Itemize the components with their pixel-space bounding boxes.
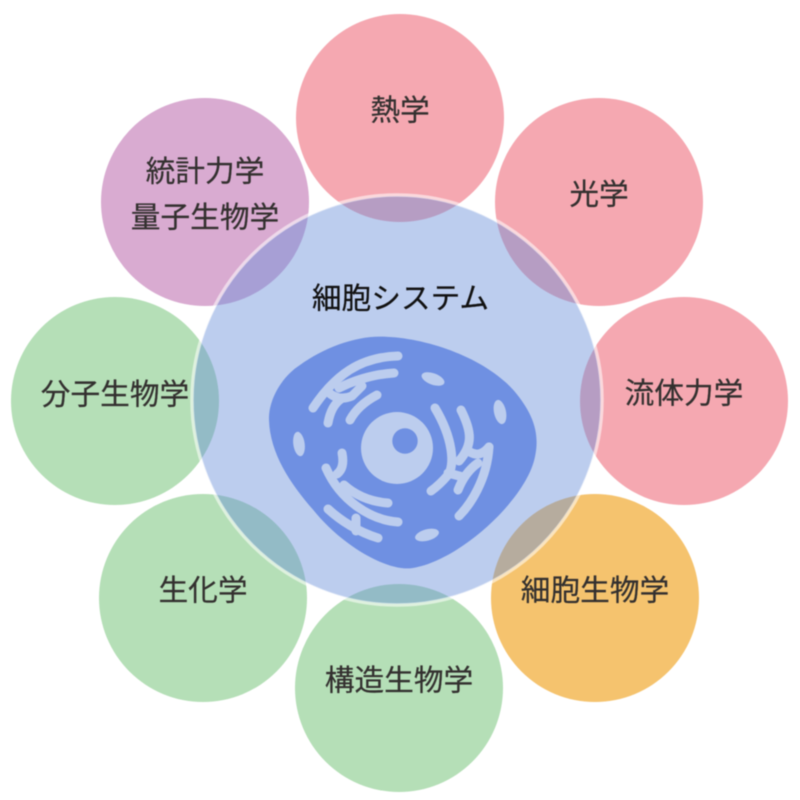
panel: structural biology circle: 構造生物学 [325,664,473,698]
icon: nucleus [361,412,433,484]
panel: thermodynamics circle: 熱学 [370,94,430,128]
panel: optics circle [495,98,703,306]
panel: statistical mechanics and quantum biology circle: 量子生物学 [131,202,279,234]
panel: optics circle: 光学 [569,178,629,212]
panel: cell biology circle [491,494,699,702]
panel: cell biology circle: 細胞生物学 [521,574,669,608]
heading: cell system: 細胞システム [312,282,489,316]
panel: thermodynamics circle [296,14,504,222]
panel: molecular biology circle [11,297,219,505]
panel: fluid mechanics circle [580,297,788,505]
icon: cell [269,337,537,568]
panel: biochemistry circle: 生化学 [158,574,248,608]
panel: molecular biology circle: 分子生物学 [41,378,189,412]
panel: statistical mechanics and quantum biology circle [101,98,309,306]
icon: vesicles [292,370,508,544]
panel: biochemistry circle [99,494,307,702]
panel: central cell system circle [192,195,602,605]
panel: statistical mechanics and quantum biology circle: 統計力学 [146,156,264,188]
panel: structural biology circle [295,584,503,792]
panel: fluid mechanics circle: 流体力学 [625,378,743,410]
